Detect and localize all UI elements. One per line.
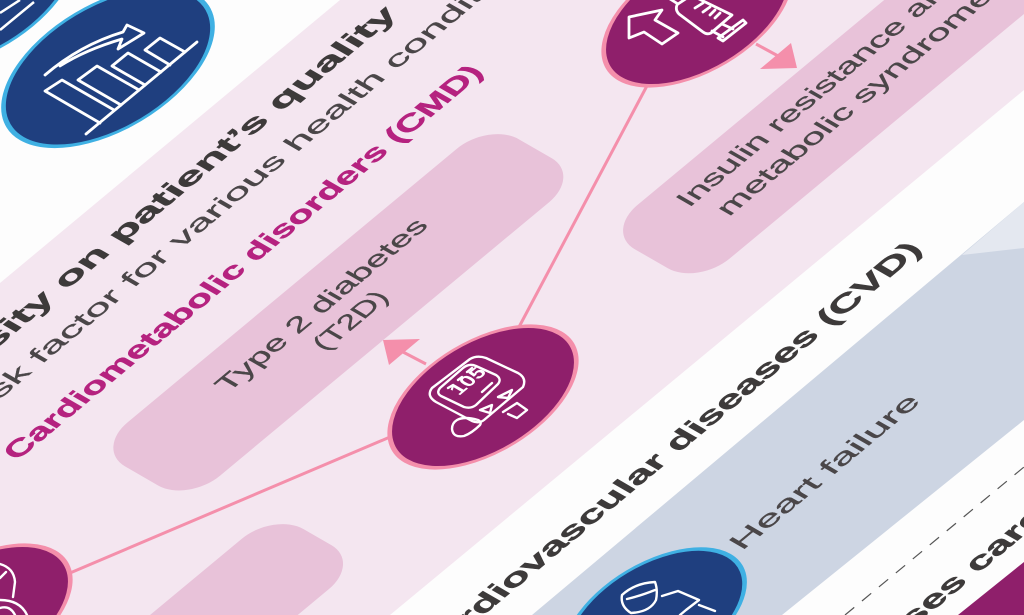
arrow: to insulin resistance (756, 43, 797, 69)
dashed divider (845, 467, 1024, 615)
box: type 2 diabetes (95, 122, 581, 503)
icon: glucose meter circle: 105 (445, 364, 491, 398)
corner: purple panel (958, 562, 1024, 615)
box: insulin resistance (605, 0, 1024, 285)
text: heart failure: Heart failure (723, 390, 927, 554)
icon: glucose meter circle (353, 303, 613, 491)
icon: bar chart circle (0, 0, 253, 173)
icon: bottom-left purple circle (0, 522, 107, 615)
text: type 2 diabetes: (T2D) (306, 287, 395, 355)
icon: syringe circle (567, 0, 827, 109)
box: third condition (0, 512, 361, 615)
panel: cardiovascular band (532, 202, 1024, 615)
connector lines (70, 82, 649, 573)
icon: top-left blue circle (0, 0, 113, 93)
text: type 2 diabetes: Type 2 diabetes (209, 215, 435, 396)
icon: heart failure circle (530, 526, 780, 615)
heading: cardiometabolic disorders: Cardiometabolic disorders (CMD) (0, 60, 490, 464)
arrow: to type 2 diabetes (383, 339, 426, 365)
